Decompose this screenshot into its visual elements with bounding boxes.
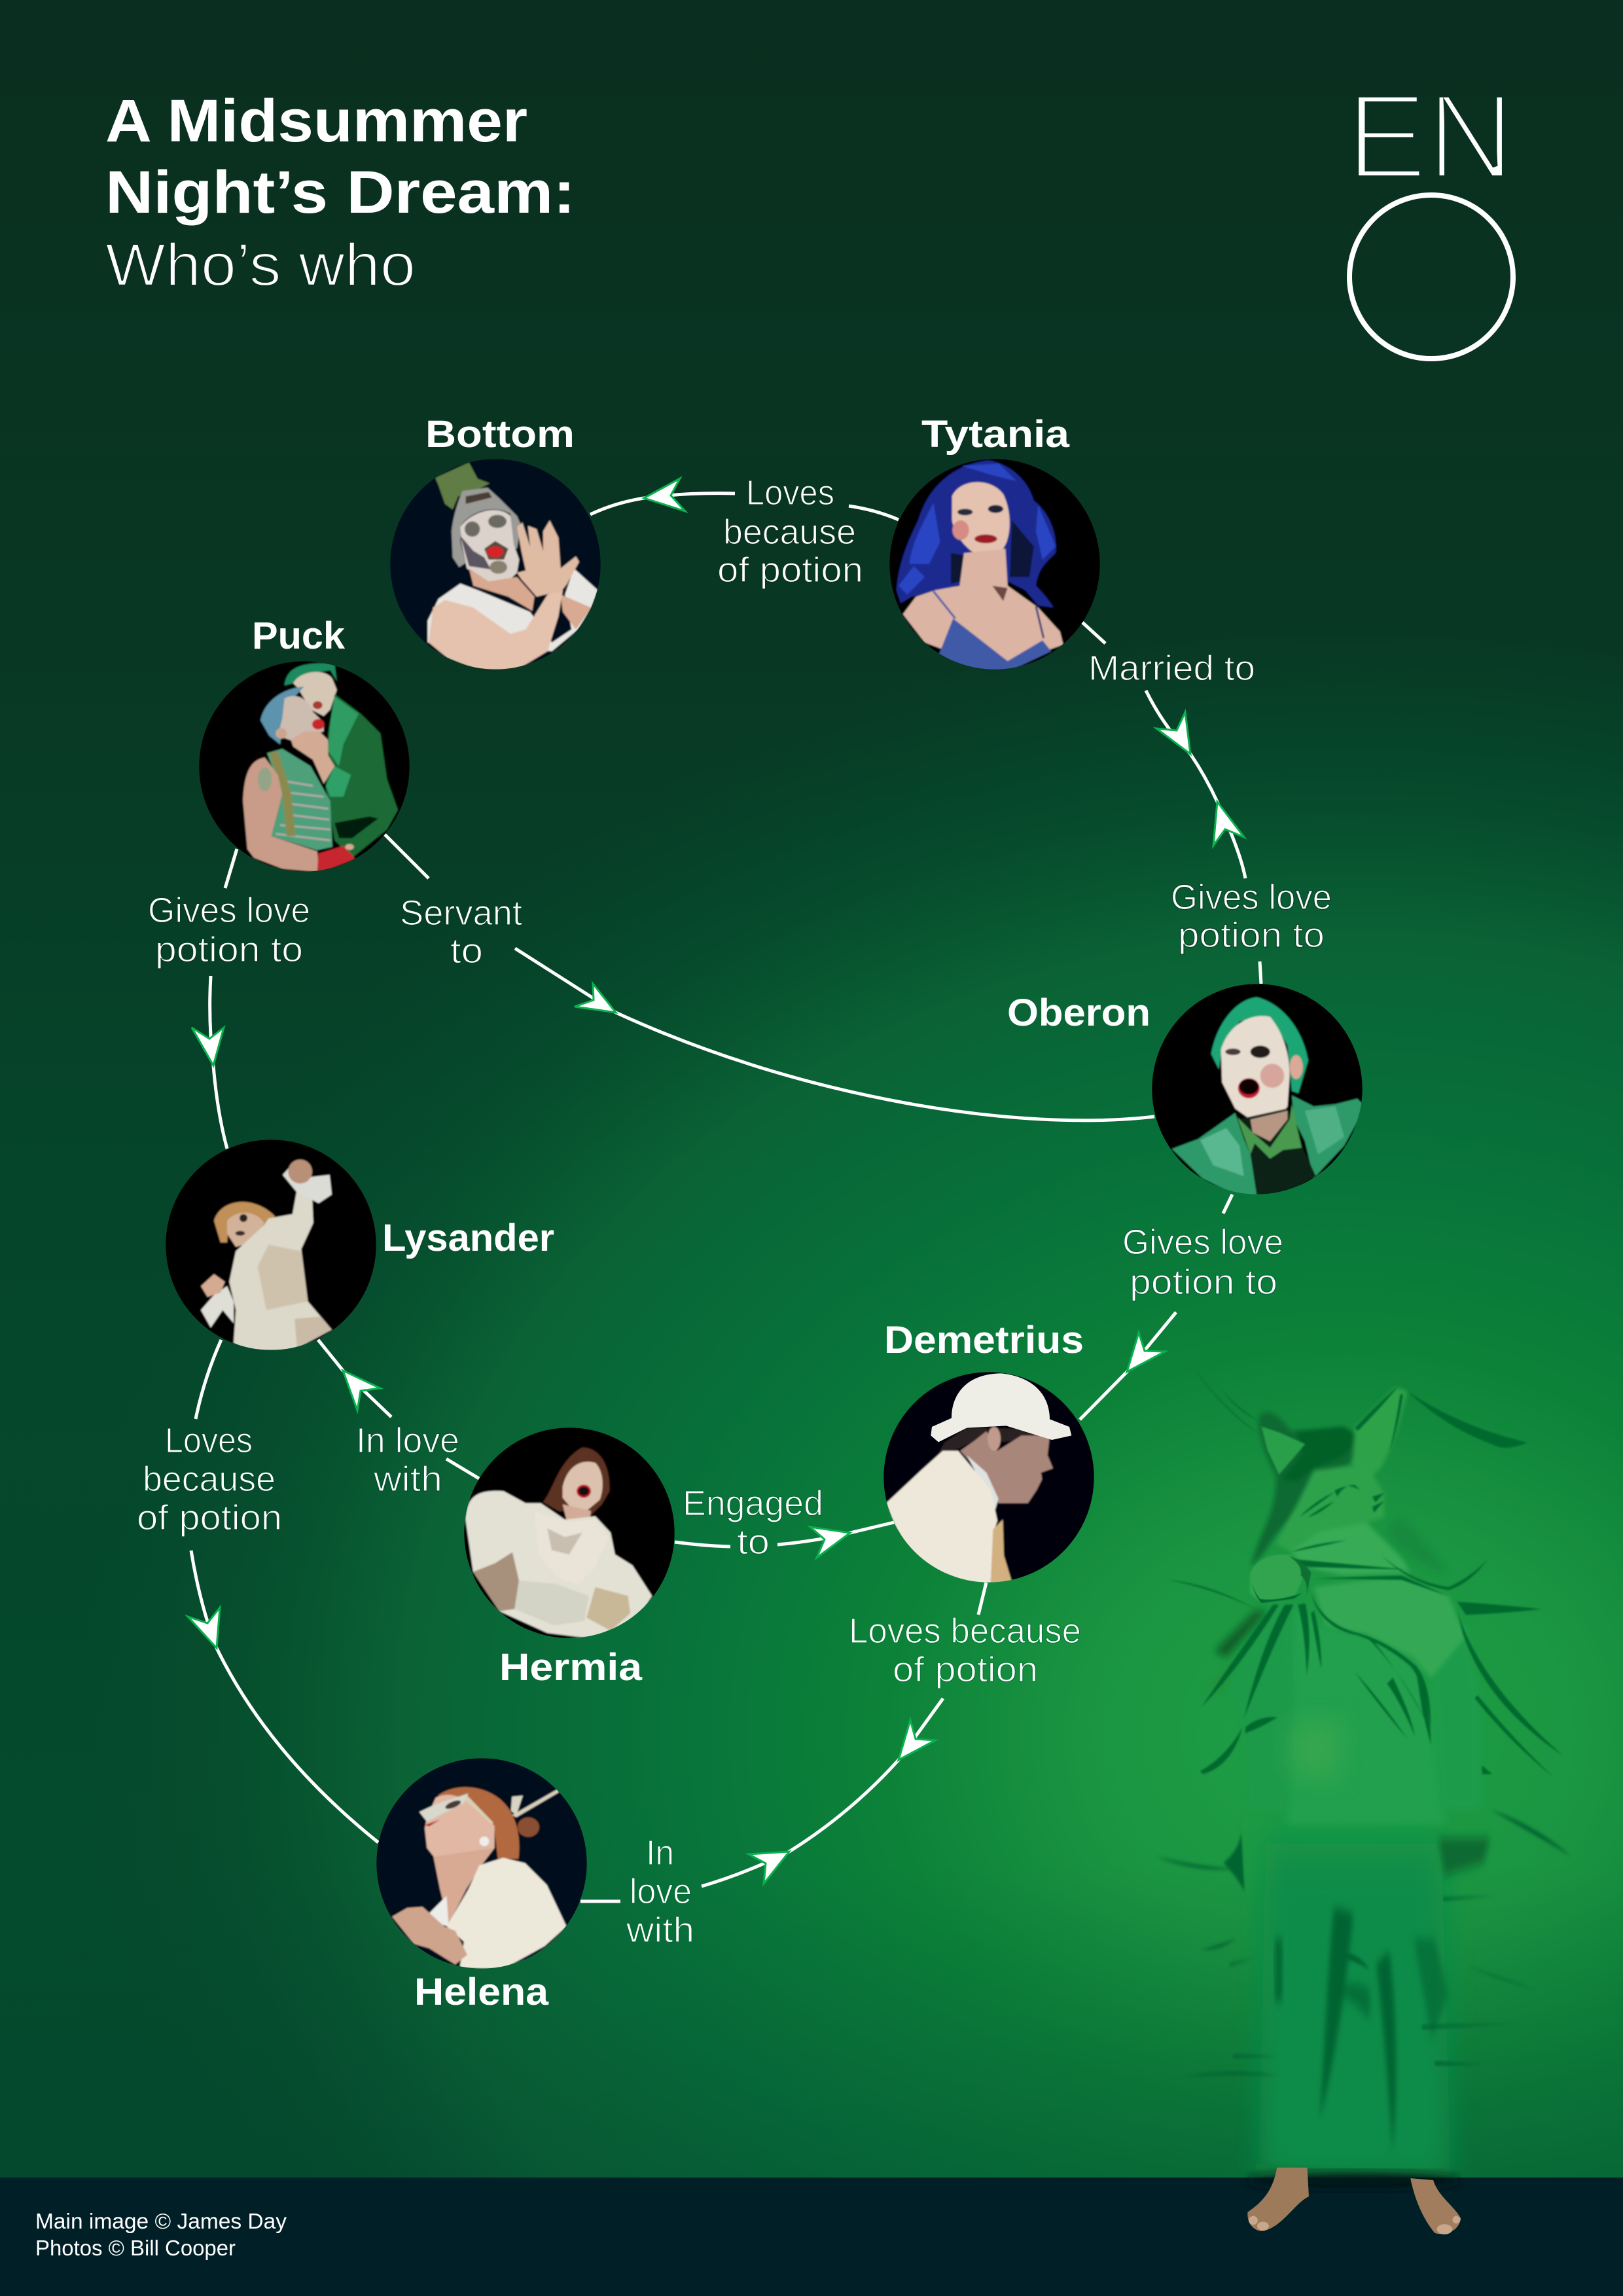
photo credits: Main image © James Day — [35, 2209, 287, 2233]
label: Oberon gives love potion to Demetrius — [1122, 1223, 1283, 1302]
label: Servant to: Servant — [400, 893, 522, 933]
ENO logo — [1346, 69, 1514, 359]
character names: Demetrius — [884, 1319, 1084, 1361]
label: Hermia in love with Lysander: In love — [356, 1421, 459, 1460]
label: Tytania loves Bottom: Loves — [746, 473, 834, 512]
photo credits: Photos © Bill Cooper — [35, 2236, 236, 2260]
cloth folds — [1168, 1356, 1562, 1777]
portrait: Demetrius — [880, 1368, 1098, 1587]
character names: Puck — [252, 615, 346, 657]
label: Married to: Married to — [1088, 649, 1255, 688]
label: Engaged to: to — [737, 1522, 770, 1562]
bare feet — [1246, 2168, 1461, 2234]
label: Oberon gives love potion to Demetrius: potion to — [1130, 1263, 1277, 1302]
label: Tytania loves Bottom: because — [723, 512, 856, 552]
portrait: Oberon — [1148, 980, 1366, 1198]
label: Lysander loves Helena: of potion — [137, 1498, 282, 1537]
character names: Lysander — [382, 1217, 554, 1259]
upper cloth: head, arms and torso — [1168, 1356, 1562, 1824]
lower cloth: legs — [1156, 1810, 1571, 2190]
portrait: Tytania — [885, 455, 1104, 673]
label: Helena in love with Demetrius: In — [646, 1833, 674, 1873]
label: Tytania loves Bottom — [717, 473, 863, 590]
hat breaking out of the circle — [931, 1373, 1071, 1442]
label: Puck gives love potion to Lysander: potion to — [155, 930, 303, 969]
label: Demetrius loves Helena — [849, 1611, 1081, 1689]
dark shadow around head — [1251, 1411, 1355, 1566]
label: Engaged to: Engaged — [683, 1484, 823, 1523]
relationship connector lines — [191, 493, 1261, 1901]
label: Oberon gives love potion to Demetrius: Gives love — [1122, 1223, 1283, 1262]
label: Oberon gives love potion to Tytania: Gives love — [1171, 878, 1332, 917]
label: Helena in love with Demetrius: with — [626, 1910, 694, 1950]
label: Engaged to — [683, 1484, 823, 1562]
character names — [252, 413, 1150, 2013]
label: Oberon gives love potion to Tytania: potion to — [1178, 916, 1325, 955]
character names: Hermia — [499, 1646, 643, 1689]
portrait: Bottom — [386, 455, 605, 673]
title: Night’s Dream: — [105, 159, 575, 226]
portrait: Helena — [372, 1754, 591, 1973]
character names: Bottom — [425, 413, 575, 456]
label: Puck gives love potion to Lysander — [148, 891, 310, 969]
label: Lysander loves Helena: because — [143, 1460, 276, 1499]
label: Demetrius loves Helena: Loves because — [849, 1611, 1081, 1651]
label: Helena in love with Demetrius — [626, 1833, 694, 1950]
relationship labels — [137, 473, 1332, 1950]
title: Who’s who — [105, 232, 416, 298]
main image: figure draped in green cloth — [1156, 1356, 1571, 2190]
ENO logo: EN — [1346, 69, 1514, 204]
label: Servant to — [400, 893, 522, 971]
photo credits — [35, 2209, 287, 2260]
title — [105, 88, 575, 298]
label: Demetrius loves Helena: of potion — [893, 1650, 1038, 1689]
label: Tytania loves Bottom: of potion — [717, 550, 863, 590]
character names: Tytania — [921, 413, 1070, 456]
label: Servant to: to — [450, 931, 483, 971]
label: Oberon gives love potion to Tytania — [1171, 878, 1332, 955]
floor band — [0, 2178, 1623, 2296]
label: Hermia in love with Lysander — [356, 1421, 459, 1499]
character names: Helena — [414, 1971, 549, 2013]
portrait: Hermia — [460, 1424, 679, 1642]
label: Lysander loves Helena — [137, 1421, 282, 1537]
label: Puck gives love potion to Lysander: Gives love — [148, 891, 310, 930]
portrait: Lysander — [162, 1136, 380, 1354]
arrowheads — [188, 478, 1244, 1884]
title: A Midsummer — [105, 88, 527, 154]
character names: Oberon — [1007, 992, 1150, 1034]
label: Helena in love with Demetrius: love — [630, 1872, 692, 1911]
label: Lysander loves Helena: Loves — [165, 1421, 253, 1460]
portrait: Puck — [195, 657, 414, 876]
label: Hermia in love with Lysander: with — [373, 1460, 442, 1499]
